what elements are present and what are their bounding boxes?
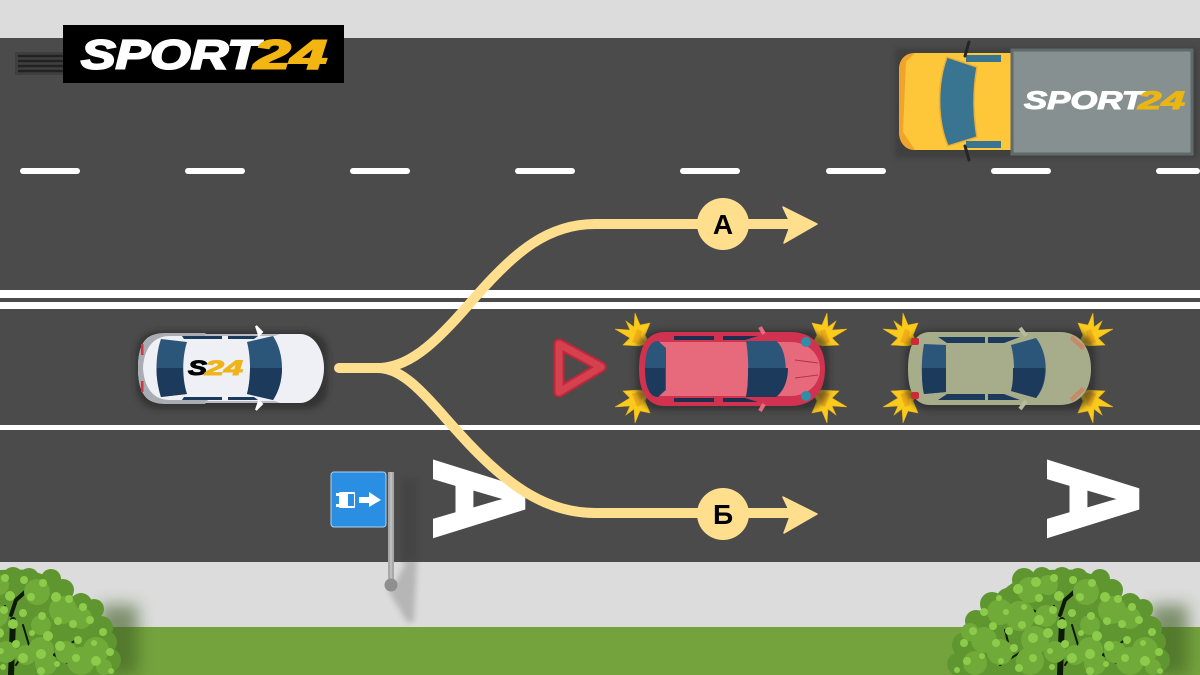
road marking A right: А <box>1021 459 1164 539</box>
warning triangle <box>559 344 601 392</box>
tree right <box>947 567 1170 675</box>
drain grate <box>15 52 65 75</box>
truck <box>895 42 1197 160</box>
hazard bursts olive car <box>883 313 1113 423</box>
Sport24 logo <box>63 25 344 83</box>
car S24 logo: 24 <box>203 357 244 380</box>
hazard bursts red car <box>615 313 847 423</box>
red broken-down car <box>636 327 829 411</box>
tree shadow right <box>1150 605 1188 675</box>
logo wordmark <box>81 32 327 78</box>
sign shadow on road <box>402 478 417 562</box>
logo wordmark: SPORT <box>81 32 263 78</box>
car S24 logo <box>188 357 244 380</box>
double solid line <box>0 290 1200 309</box>
grass <box>0 627 1200 675</box>
trajectory paths <box>339 224 795 513</box>
white S24 car <box>136 326 328 410</box>
path stem <box>339 363 380 373</box>
logo wordmark: 24 <box>252 32 327 78</box>
truck logo: 24 <box>1136 87 1185 115</box>
olive broken-down car <box>905 328 1095 410</box>
arrow head B <box>783 497 817 533</box>
truck cargo box <box>1012 50 1192 154</box>
path B <box>378 368 795 513</box>
path A <box>378 224 795 368</box>
blue bus lane road sign <box>331 472 386 527</box>
car S24 logo: S <box>188 357 207 380</box>
lane dashes <box>20 168 1200 174</box>
label B: Б <box>713 499 733 530</box>
label A: А <box>713 209 733 240</box>
tree shadow left <box>100 605 138 675</box>
label B <box>697 488 749 540</box>
sign pole <box>384 472 398 592</box>
truck logo <box>1024 87 1185 115</box>
bottom sidewalk <box>0 562 1200 627</box>
truck logo: SPORT <box>1024 87 1147 115</box>
top sidewalk <box>0 0 1200 38</box>
tree left <box>0 567 121 675</box>
road marking A left: А <box>407 459 550 539</box>
asphalt road <box>0 38 1200 562</box>
arrow head A <box>783 207 817 243</box>
truck cab <box>899 53 1012 150</box>
bus lane solid line <box>0 425 1200 430</box>
label A <box>697 198 749 250</box>
sign shadow on sidewalk <box>388 562 417 622</box>
